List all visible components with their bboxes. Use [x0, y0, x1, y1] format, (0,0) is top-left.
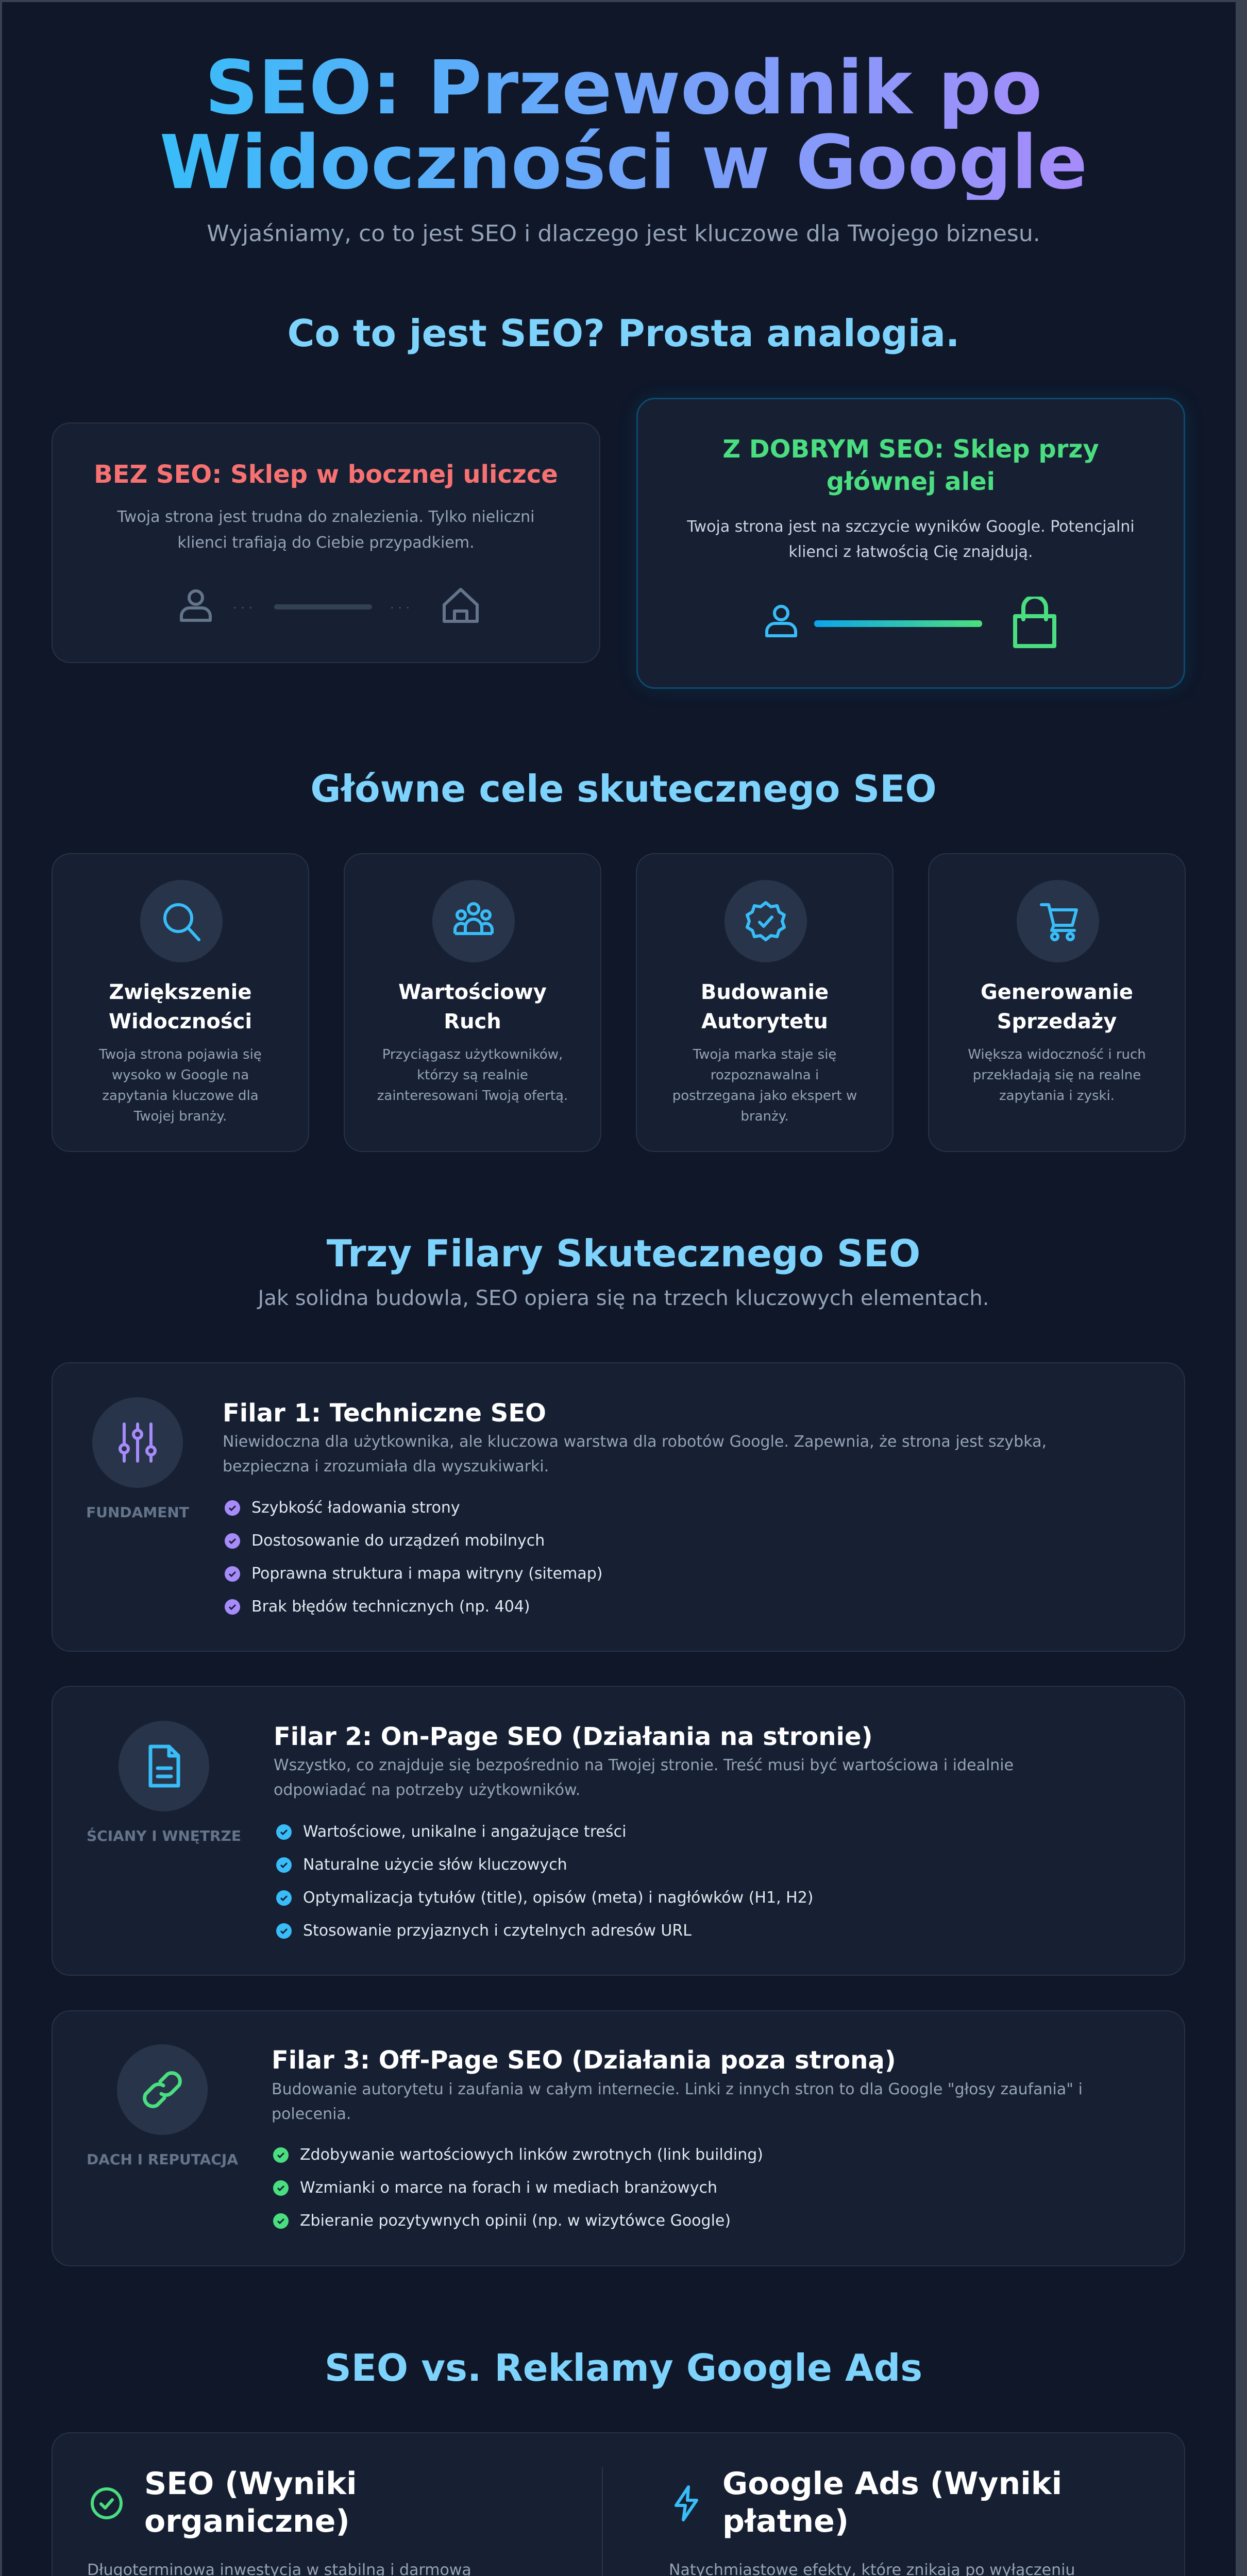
- goal text: branży.: [740, 1109, 789, 1124]
- heading: comparison: SEO vs. Reklamy Google Ads: [325, 2346, 922, 2389]
- icon: user to hidden shop: · · ·: [390, 601, 410, 615]
- icon: user to hidden shop: [180, 588, 479, 623]
- bullet list: Stosowanie przyjaznych i czytelnych adresów URL: [303, 1922, 692, 1940]
- goal text: [377, 1047, 568, 1104]
- goal title: [981, 980, 1133, 1033]
- column title: Ads: płatne): [722, 2503, 849, 2539]
- text: with SEO: [687, 518, 1135, 561]
- icon: cart: [1017, 880, 1099, 962]
- goal title: [701, 980, 829, 1033]
- column title: Ads: Google Ads (Wyniki: [722, 2466, 1062, 2502]
- goal title: Budowanie: [701, 980, 829, 1004]
- goal text: zapytania i zyski.: [999, 1088, 1115, 1104]
- text: without SEO: Twoja strona jest trudna do znalezienia. Tylko nieliczni: [117, 508, 534, 526]
- panel: pillar 1: [52, 1362, 1185, 1652]
- label: DACH I REPUTACJA: [87, 2151, 238, 2168]
- label: ŚCIANY I WNĘTRZE: [87, 1827, 241, 1844]
- pillar title: Filar 2: On-Page SEO (Działania na stronie): [274, 1722, 873, 1751]
- icon: lightning: [673, 2485, 700, 2524]
- goal text: rozpoznawalna i: [711, 1067, 819, 1083]
- bullet list: [225, 1499, 602, 1616]
- goal title: Zwiększenie: [109, 980, 251, 1004]
- heading: with SEO: [722, 435, 1099, 496]
- column title: Ads: [722, 2465, 1062, 2540]
- heading: without SEO: BEZ SEO: Sklep w bocznej uliczce: [94, 460, 558, 489]
- goal text: Przyciągasz użytkowników,: [382, 1047, 563, 1062]
- goal text: zapytania kluczowe dla: [102, 1088, 259, 1104]
- pillar title: Filar 1: Techniczne SEO: [223, 1399, 546, 1428]
- panel: pillar 2: [52, 1686, 1185, 1976]
- goal text: [99, 1047, 262, 1124]
- heading: with SEO: głównej alei: [827, 467, 995, 496]
- subtitle: pillars: Jak solidna budowla, SEO opiera się na trzech kluczowych elementach.: [258, 1286, 989, 1310]
- panel: without SEO: [52, 422, 600, 663]
- bullet list: [273, 2146, 763, 2230]
- panel: goal traffic: [344, 853, 601, 1152]
- icon: check circle: [91, 2487, 123, 2519]
- icon: sliders: [92, 1397, 183, 1488]
- pillar text: Budowanie autorytetu i zaufania w całym internecie. Linki z innych stron to dla Google "głosy zaufania" i: [272, 2080, 1083, 2098]
- bullet list: Zdobywanie wartościowych linków zwrotnych (link building): [300, 2146, 763, 2164]
- bullet list: Naturalne użycie słów kluczowych: [303, 1856, 567, 1874]
- text: without SEO: klienci trafiają do Ciebie przypadkiem.: [177, 534, 475, 552]
- goal text: postrzegana jako ekspert w: [672, 1088, 857, 1104]
- column title: SEO: organiczne): [144, 2503, 350, 2539]
- bullet list: Brak błędów technicznych (np. 404): [251, 1598, 530, 1616]
- goal title: Generowanie: [981, 980, 1133, 1004]
- icon: user to shop bag: [765, 597, 1056, 648]
- bullet list: Zbieranie pozytywnych opinii (np. w wizytówce Google): [300, 2212, 731, 2230]
- pillar text: [223, 1433, 1047, 1476]
- pillar text: bezpieczna i zrozumiała dla wyszukiwarki.: [223, 1458, 549, 1476]
- panel: goal visibility: [52, 853, 309, 1152]
- panel: goal authority: [636, 853, 894, 1152]
- goal title: [398, 980, 547, 1033]
- goal title: Sprzedaży: [997, 1010, 1117, 1033]
- pillar text: polecenia.: [272, 2105, 351, 2123]
- pillar text: odpowiadać na potrzeby użytkowników.: [274, 1781, 580, 1799]
- goal text: przekładają się na realne: [973, 1067, 1141, 1083]
- icon: users: [432, 880, 515, 962]
- icon: document: [119, 1721, 209, 1811]
- goal text: [968, 1047, 1146, 1104]
- panel: with SEO: [636, 398, 1185, 689]
- goal text: Twoja marka staje się: [693, 1047, 836, 1062]
- bullet list: [276, 1823, 813, 1940]
- pillar text: [272, 2080, 1083, 2123]
- goal title: Autorytetu: [701, 1010, 828, 1033]
- pillar text: Niewidoczna dla użytkownika, ale kluczowa warstwa dla robotów Google. Zapewnia, że strona jest szybka,: [223, 1433, 1047, 1451]
- title: Widoczności w Google: [160, 119, 1087, 206]
- title: [160, 44, 1087, 206]
- bullet list: Optymalizacja tytułów (title), opisów (meta) i nagłówków (H1, H2): [303, 1889, 813, 1907]
- goal text: Twoja strona pojawia się: [99, 1047, 262, 1062]
- pillar title: Filar 3: Off-Page SEO (Działania poza stroną): [272, 2046, 896, 2075]
- label: FUNDAMENT: [86, 1504, 189, 1521]
- bullet list: Wartościowe, unikalne i angażujące treści: [303, 1823, 626, 1841]
- heading: pillars: Trzy Filary Skutecznego SEO: [327, 1232, 920, 1275]
- goal title: Wartościowy: [398, 980, 547, 1004]
- icon: badge: [724, 880, 807, 962]
- text: without SEO: [117, 508, 534, 552]
- heading: with SEO: Z DOBRYM SEO: Sklep przy: [722, 435, 1099, 464]
- goal title: [109, 980, 252, 1033]
- subtitle: Wyjaśniamy, co to jest SEO i dlaczego jest kluczowe dla Twojego biznesu.: [207, 221, 1040, 247]
- bullet list: Dostosowanie do urządzeń mobilnych: [251, 1532, 545, 1550]
- panel: pillar 3: [52, 2010, 1185, 2266]
- goal text: [672, 1047, 857, 1124]
- goal text: Twojej branży.: [134, 1109, 227, 1124]
- heading: analogy: Co to jest SEO? Prosta analogia.: [288, 312, 959, 355]
- goal text: zainteresowani Twoją ofertą.: [377, 1088, 568, 1104]
- goal text: wysoko w Google na: [112, 1067, 249, 1083]
- bullet list: Szybkość ładowania strony: [251, 1499, 460, 1517]
- column title: SEO: [144, 2466, 357, 2539]
- icon: user to hidden shop: · · ·: [233, 601, 252, 615]
- goal text: którzy są realnie: [417, 1067, 528, 1083]
- pillar text: Wszystko, co znajduje się bezpośrednio na Twojej stronie. Treść musi być wartościowa i idealnie: [274, 1756, 1014, 1774]
- bullet list: Wzmianki o marce na forach i w mediach branżowych: [300, 2179, 717, 2197]
- icon: search: [140, 880, 223, 962]
- pillar text: [274, 1756, 1014, 1799]
- text: with SEO: klienci z łatwością Cię znajdują.: [788, 543, 1033, 561]
- goal text: Większa widoczność i ruch: [968, 1047, 1146, 1062]
- heading: goals: Główne cele skutecznego SEO: [310, 767, 937, 810]
- bullet list: Poprawna struktura i mapa witryny (sitemap): [251, 1565, 602, 1583]
- text: with SEO: Twoja strona jest na szczycie wyników Google. Potencjalni: [687, 518, 1135, 536]
- panel: goal sales: [928, 853, 1186, 1152]
- title: SEO: Przewodnik po: [205, 44, 1042, 131]
- icon: link: [117, 2044, 208, 2135]
- goal title: Ruch: [444, 1010, 501, 1033]
- panel: comparison: [52, 2432, 1185, 2576]
- goal title: Widoczności: [109, 1010, 252, 1033]
- column title: SEO: SEO (Wyniki: [144, 2466, 357, 2502]
